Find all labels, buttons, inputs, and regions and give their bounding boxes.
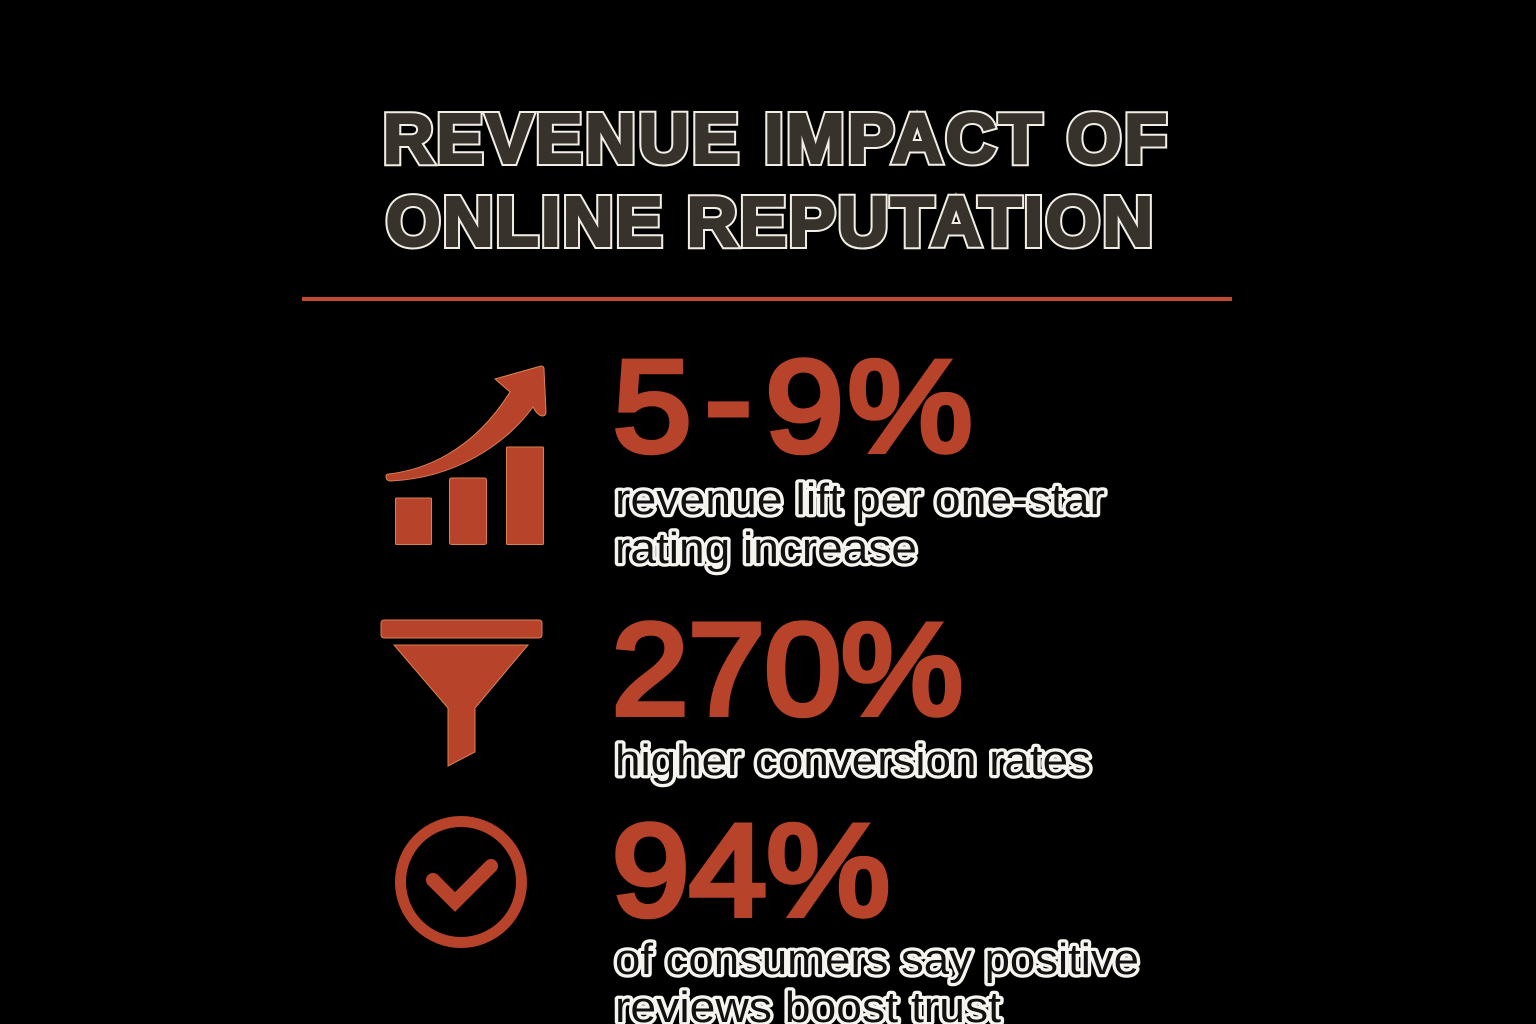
icon: rising bar chart with arrow [386,366,546,544]
stat row: trust [400,797,1139,1024]
stat description: rating increase [615,524,917,573]
stat row: revenue lift [386,327,1105,573]
title: REVENUE IMPACT OF [383,100,1167,178]
stat description: revenue lift per one-star [615,475,1105,524]
stat description: higher conversion rates [615,736,1091,785]
title [383,100,1167,260]
stat value: 5-9%: 5-9% [613,327,972,479]
stat value: 94%: 94% [612,797,890,943]
title: REVENUE IMPACT OF [383,100,1167,178]
icon: funnel [381,620,542,766]
stat description [615,475,1105,573]
stat description: of consumers say positive [615,935,1139,984]
icon: check mark in circle [400,822,522,942]
stat description [615,935,1139,1024]
title: ONLINE REPUTATION [386,182,1153,260]
stat row: conversion [381,596,1091,785]
title: ONLINE REPUTATION [386,182,1153,260]
stat value: 270%: 270% [612,596,963,742]
